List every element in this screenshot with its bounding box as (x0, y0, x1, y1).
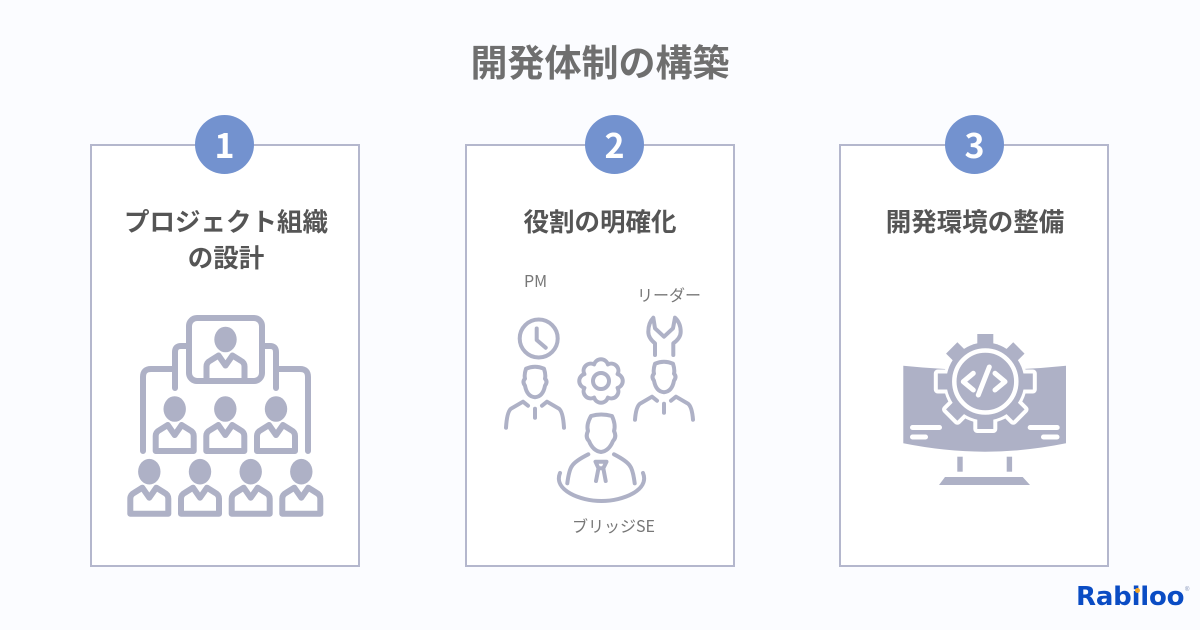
person row 2 (156, 396, 295, 451)
label: leader: リーダー (637, 282, 701, 306)
heading: organization (124, 209, 328, 273)
badge 1 (195, 115, 254, 174)
panel: organization (90, 144, 360, 567)
gear (938, 334, 1033, 429)
top frame (189, 318, 262, 381)
icon: team roles (504, 316, 695, 503)
icon: organization chart (127, 315, 324, 517)
label: bridge SE: ブリッジSE (572, 513, 655, 537)
icon: clock (520, 320, 558, 358)
heading: environment: 開発環境の整備 (886, 209, 1064, 237)
icon: wrench (648, 318, 681, 355)
panel: roles (465, 144, 735, 567)
monitor stand (939, 457, 1030, 485)
connectors (143, 346, 308, 451)
heading: organization: の設計 (188, 245, 264, 273)
badge 3: 3 (964, 119, 985, 168)
leader person (635, 362, 693, 420)
PM person (506, 367, 564, 428)
label: PM: PM (524, 268, 547, 292)
title: 開発体制の構築 (470, 43, 730, 84)
panel: environment (839, 144, 1109, 567)
badge 2 (585, 115, 644, 174)
screen lines (910, 425, 1060, 440)
icon: gear (579, 359, 623, 403)
person row 3 (130, 459, 320, 514)
badge 2: 2 (604, 119, 625, 168)
icon: monitor with code gear (903, 334, 1066, 485)
code symbol (963, 367, 1005, 395)
logo: Rabiloo (1076, 582, 1184, 612)
bridge SE person (559, 414, 644, 501)
logo dot (1134, 588, 1140, 592)
registered mark: ® (1185, 587, 1189, 593)
monitor screen (903, 366, 1066, 452)
heading: organization: プロジェクト組織 (124, 209, 328, 237)
badge 1: 1 (214, 119, 235, 168)
badge 3 (945, 115, 1004, 174)
heading: roles: 役割の明確化 (523, 209, 676, 237)
leader person (206, 327, 244, 380)
